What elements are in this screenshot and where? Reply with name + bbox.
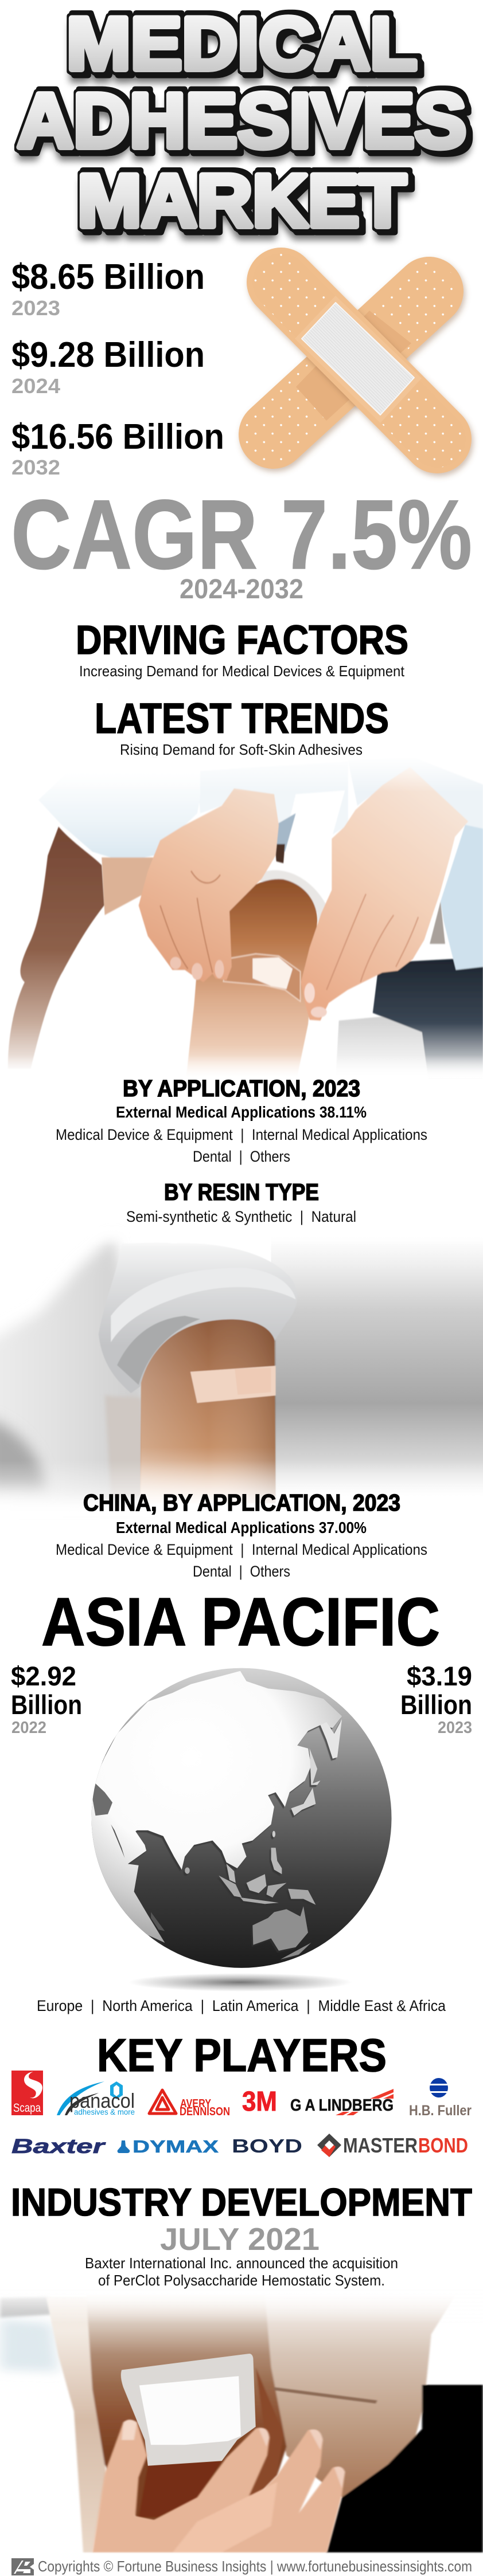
logo: Master Bond: [317, 2134, 468, 2157]
highlighted share: External Medical Applications 37.00%: [116, 1519, 367, 1536]
photo: doctor applying bandage to patient's arm: [0, 756, 483, 1078]
logo: Panacol: panacol: [69, 2089, 135, 2112]
stat 2023: [11, 257, 205, 320]
logo: Scapa: Scapa: [13, 2101, 41, 2115]
market size statistics: [11, 257, 224, 479]
segments: Semi-synthetic & Synthetic | Natural: [126, 1208, 356, 1225]
CAGR period: 2024-2032: [180, 574, 303, 605]
text: trend detail: Rising Demand for Soft-Skin Adhesives: [120, 741, 363, 758]
heading: BY RESIN TYPE: [164, 1179, 319, 1205]
section: China by application: [56, 1489, 427, 1580]
section: by resin type: [126, 1179, 356, 1225]
stat: Asia Pacific 2022: 2022: [11, 1719, 46, 1737]
logo: G A Lindberg: [290, 2089, 394, 2115]
heading: key players: KEY PLAYERS: [97, 2030, 387, 2081]
title: MEDICAL: [67, 2, 417, 85]
text: development detail: [85, 2255, 398, 2289]
stat: Asia Pacific 2023: Billion: [400, 1689, 472, 1720]
logo: G A Lindberg: G A LINDBERG: [290, 2096, 394, 2115]
globe showing Asia Pacific: [86, 1668, 392, 1968]
photo: hand pressing wound dressing on arm: [0, 2289, 483, 2553]
stat: Asia Pacific 2022: Billion: [11, 1689, 82, 1720]
logo: Dymax: [118, 2136, 219, 2157]
logo: H.B. Fuller: H.B. Fuller: [409, 2103, 472, 2119]
footer: [11, 2558, 472, 2575]
logo: H.B. Fuller: [409, 2078, 472, 2119]
segments line two: Dental | Others: [193, 1148, 290, 1165]
logo: Scapa: [11, 2071, 43, 2115]
logo: Panacol: adhesives & more: [74, 2107, 135, 2116]
logo: Avery Dennison: AVERY: [180, 2097, 212, 2110]
logo: Avery Dennison: DENNISON: [180, 2106, 230, 2118]
text: driving factor detail: Increasing Demand for Medical Devices & Equipment: [79, 662, 405, 680]
stat 2032: [11, 417, 224, 479]
heading: CHINA, BY APPLICATION, 2023: [83, 1489, 400, 1516]
stat 2024: [11, 335, 205, 398]
icon: Fortune Business Insights logo: [11, 2558, 34, 2575]
stat: Asia Pacific 2023: 2023: [438, 1719, 472, 1737]
globe ground shadow: [128, 1973, 352, 1991]
segments line one: Medical Device & Equipment | Internal Medical Applications: [56, 1541, 427, 1558]
text: development detail: Baxter International Inc. announced the acquisition: [85, 2255, 398, 2272]
logo: Master Bond: BOND: [418, 2134, 468, 2157]
title: MARKET: [77, 159, 406, 242]
title: [17, 2, 466, 242]
stat 2032: 2032: [11, 456, 60, 479]
heading: driving factors: DRIVING FACTORS: [76, 618, 408, 663]
logo: Dymax: DYMAX: [133, 2136, 219, 2157]
company logos: [11, 2071, 472, 2158]
title: ADHESIVES: [17, 77, 466, 164]
stat 2032: $16.56 Billion: [11, 417, 224, 457]
segments line one: Medical Device & Equipment | Internal Medical Applications: [56, 1126, 427, 1143]
stat: Asia Pacific 2022: $2.92: [11, 1661, 76, 1691]
highlighted share: External Medical Applications 38.11%: [116, 1103, 367, 1121]
logo: Boyd: BOYD: [232, 2135, 302, 2157]
stat 2023: 2023: [11, 296, 60, 320]
logo: Panacol: [57, 2081, 135, 2116]
logo: Avery Dennison: [149, 2090, 230, 2118]
text: other regions: Europe | North America | Latin America | Middle East & Africa: [37, 1997, 446, 2014]
stat 2024: $9.28 Billion: [11, 335, 205, 375]
section: by application 2023: [56, 1075, 427, 1165]
stat 2024: 2024: [11, 374, 60, 398]
heading: BY APPLICATION, 2023: [123, 1075, 360, 1101]
stat: Asia Pacific 2022: [11, 1661, 82, 1737]
icon: crossed bandages: [273, 282, 437, 439]
heading: Asia Pacific: ASIA PACIFIC: [41, 1584, 440, 1660]
logo: 3M: 3M: [242, 2087, 277, 2117]
segments line two: Dental | Others: [193, 1563, 290, 1580]
stat: Asia Pacific 2023: [400, 1661, 472, 1737]
stat 2023: $8.65 Billion: [11, 257, 205, 297]
date: July 2021: JULY 2021: [160, 2221, 320, 2257]
logo: Baxter: Baxter: [11, 2135, 107, 2158]
text: development detail: of PerClot Polysaccharide Hemostatic System.: [98, 2272, 385, 2289]
logo: Master Bond: MASTER: [343, 2134, 418, 2157]
photo: arm with bandage: [0, 1227, 483, 1516]
stat: Asia Pacific 2023: $3.19: [407, 1661, 472, 1691]
heading: latest trends: LATEST TRENDS: [95, 695, 389, 742]
